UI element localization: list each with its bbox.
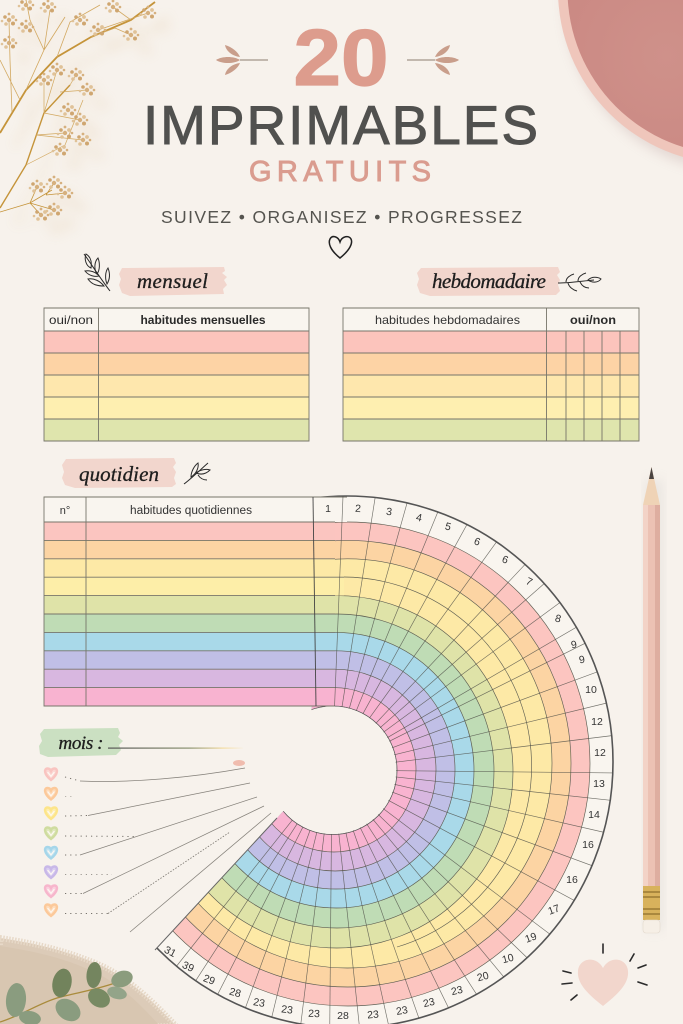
- rim day numbers: 5: [444, 520, 453, 534]
- icon: sprig mensuel: [84, 254, 110, 291]
- rim day numbers: 2: [355, 503, 361, 515]
- rim day numbers: 17: [546, 902, 562, 918]
- rainbow fan chart: [44, 470, 632, 1024]
- icon: sprig hebdomadaire: [558, 273, 601, 291]
- fan spokes: [176, 496, 612, 1024]
- rim day numbers: 12: [594, 747, 606, 759]
- label: hebdomadaire: hebdomadaire: [432, 269, 546, 293]
- pencil: [643, 467, 662, 933]
- rim day numbers: 28: [337, 1010, 349, 1022]
- fan end edge: [155, 818, 277, 950]
- icon: heart outline: [329, 237, 352, 258]
- label: hebdomadaire: [417, 267, 560, 296]
- label: quotidien: quotidien: [79, 462, 159, 486]
- table: hebdomadaire: oui/non: [570, 313, 616, 327]
- rim day numbers: 16: [566, 874, 578, 886]
- rim day numbers: 1: [325, 503, 331, 515]
- subtitle: gratuits: GRATUITS: [249, 156, 431, 188]
- rim day numbers: 7: [524, 575, 534, 589]
- rim day numbers: 4: [415, 512, 423, 525]
- habit writing lines: [65, 768, 271, 932]
- table: mensuel: [44, 308, 309, 441]
- daily table rows: [44, 497, 347, 706]
- rim day numbers: 20: [476, 970, 490, 984]
- hole cover: [269, 706, 397, 834]
- habit hearts list: [45, 768, 57, 916]
- rim day numbers: 29: [201, 972, 217, 988]
- icon: sprig quotidien: [184, 463, 210, 484]
- table: mensuel: oui/non: [49, 313, 93, 327]
- header labels: n°: [60, 505, 70, 517]
- rim day numbers: 23: [450, 984, 464, 998]
- rim day numbers: 10: [501, 952, 515, 966]
- rim day numbers: 23: [308, 1008, 320, 1020]
- linen fabric bottom left: [0, 938, 176, 1024]
- table: mensuel: habitudes mensuelles: [140, 313, 266, 327]
- mois underline: [108, 748, 243, 749]
- left decorative leaf: [216, 45, 268, 75]
- header labels: [60, 505, 252, 517]
- label: mois: [39, 728, 123, 757]
- rim day numbers: [162, 503, 606, 1022]
- rim day numbers: 23: [252, 996, 266, 1010]
- rim day numbers: 8: [554, 612, 563, 626]
- pink plate top right: [558, 0, 683, 172]
- title: 20: 20: [294, 13, 388, 102]
- rim day numbers: 9: [570, 639, 578, 651]
- table: hebdomadaire: habitudes hebdomadaires: [375, 313, 520, 327]
- rim day numbers: 31: [162, 944, 178, 960]
- table: hebdomadaire: [343, 308, 639, 441]
- header labels: habitudes quotidiennes: [130, 505, 252, 517]
- icon: heart with rays: [562, 944, 647, 1006]
- rim day numbers: 19: [523, 930, 539, 946]
- title: imprimables: IMPRIMABLES: [143, 94, 538, 156]
- rim day numbers: 23: [422, 996, 436, 1010]
- dried flowers top left: [0, 0, 170, 235]
- rim day numbers: 12: [591, 716, 603, 728]
- tagline: SUIVEZ • ORGANISEZ • PROGRESSEZ: [161, 207, 522, 227]
- rim day numbers: 14: [588, 809, 600, 821]
- label: mensuel: mensuel: [137, 269, 208, 293]
- smudge: [233, 760, 245, 766]
- rim day numbers: 13: [593, 778, 605, 790]
- right decorative leaf: [407, 45, 459, 75]
- label: mois: mois :: [58, 733, 104, 754]
- rim day numbers: 23: [280, 1003, 294, 1017]
- rim day numbers: 23: [395, 1004, 409, 1018]
- eucalyptus branch: [0, 961, 135, 1024]
- label: quotidien: [62, 458, 176, 488]
- rim day numbers: 3: [385, 506, 393, 518]
- rim day numbers: 39: [180, 959, 196, 975]
- rim day numbers: 6: [472, 535, 482, 549]
- label: mensuel: [119, 267, 227, 296]
- rim day numbers: 23: [367, 1009, 379, 1021]
- rim day numbers: 16: [582, 839, 594, 851]
- rim day numbers: 6: [500, 553, 510, 567]
- rim day numbers: 10: [585, 684, 597, 696]
- rim day numbers: 28: [228, 986, 242, 1000]
- rim day numbers: 9: [578, 654, 586, 666]
